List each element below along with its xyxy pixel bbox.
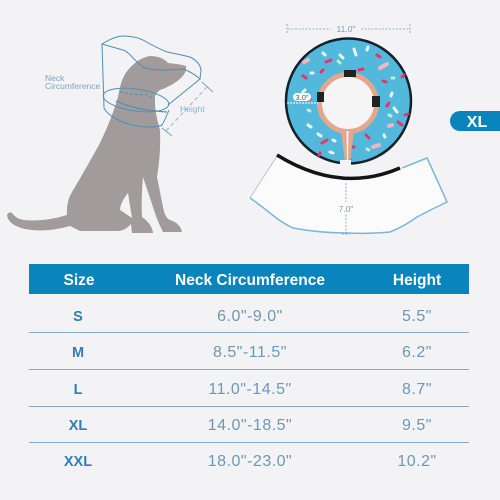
- dimension: 7.0: [342, 183, 350, 234]
- seam notch: [341, 131, 354, 162]
- inner opening: [320, 74, 376, 132]
- label: circumference: Circumference: [45, 81, 101, 91]
- table header: Height: [393, 272, 441, 289]
- row M: M: [72, 345, 84, 361]
- dimension: 3.0: [287, 102, 318, 104]
- row L: [74, 381, 432, 398]
- row L: 8.7": [402, 381, 432, 398]
- table header: Neck Circumference: [175, 272, 325, 289]
- row S: S: [73, 309, 83, 325]
- dimension: top width 11.0: 11.0": [337, 24, 355, 34]
- size table: [29, 264, 469, 470]
- row XL: 9.5": [402, 417, 432, 434]
- row XXL: 18.0"-23.0": [208, 453, 292, 470]
- row S: 6.0"-9.0": [217, 308, 283, 325]
- row M: [72, 344, 432, 361]
- row XL: [69, 417, 432, 434]
- velcro tabs: [344, 70, 356, 77]
- row XL: 14.0"-18.5": [208, 417, 292, 434]
- label: height: Height: [180, 104, 205, 114]
- row S: [73, 308, 432, 325]
- row M: 6.2": [402, 344, 432, 361]
- dimension: top width 11.0: [287, 24, 410, 34]
- height measure: [162, 82, 213, 136]
- size badge: XL: [467, 114, 487, 131]
- product: unrolled clear cone: [250, 155, 447, 234]
- label: neck circumference: Neck: [45, 73, 65, 83]
- icon: dog silhouette: [7, 56, 186, 233]
- size badge: [450, 111, 500, 131]
- row XL: XL: [69, 418, 87, 434]
- row XXL: XXL: [64, 454, 92, 470]
- row XXL: 10.2": [397, 453, 437, 470]
- table header: [29, 264, 469, 294]
- row M: 8.5"-11.5": [213, 344, 287, 361]
- sprinkles: [303, 47, 408, 161]
- row L: 11.0"-14.5": [208, 381, 292, 398]
- cone outline: [102, 36, 213, 136]
- dog illustration with cone: [7, 36, 213, 233]
- row L: L: [74, 382, 83, 398]
- product: donut collar: 3.0": [295, 93, 309, 102]
- row S: 5.5": [402, 308, 432, 325]
- table header: Size: [63, 272, 95, 289]
- product: unrolled clear cone: 7.0": [339, 204, 353, 214]
- product: donut collar: [286, 38, 411, 166]
- row XXL: [64, 453, 437, 470]
